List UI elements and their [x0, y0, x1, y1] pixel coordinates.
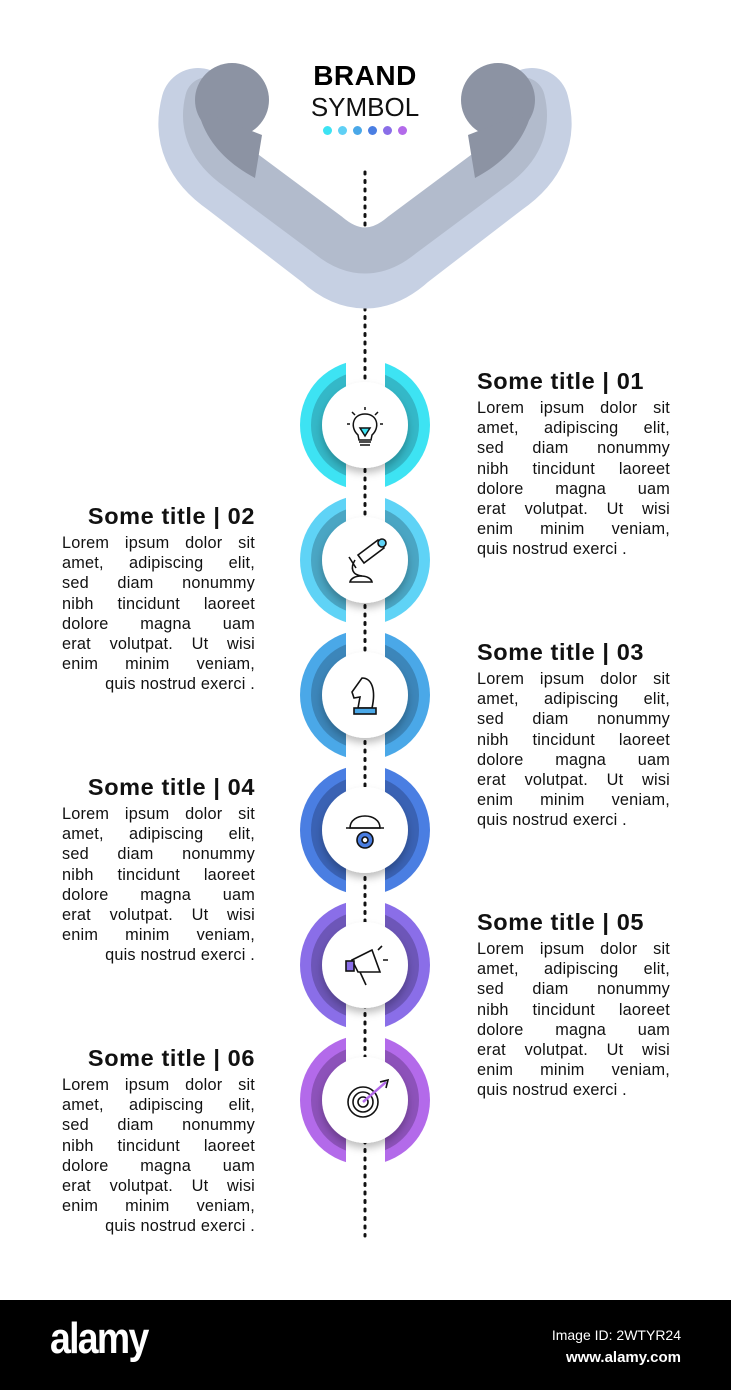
image id: Image ID: 2WTYR24: [552, 1327, 681, 1343]
text block 06: quis nostrud exerci .: [105, 1217, 255, 1235]
step 5 ring: [300, 900, 430, 1030]
color dots: [323, 126, 407, 135]
text block 06: amet, adipiscing elit,: [62, 1096, 255, 1114]
text block 03: Some title | 03: [477, 639, 644, 665]
dotted timeline: [364, 172, 366, 1236]
text block 02: [62, 503, 255, 693]
text block 04: erat volutpat. Ut wisi: [62, 906, 255, 924]
text block 01: sed diam nonummy: [477, 439, 670, 457]
text block 06: [62, 1045, 255, 1235]
text block 04: Some title | 04: [88, 774, 255, 800]
text block 02: dolore magna uam: [62, 615, 255, 633]
text block 01: Lorem ipsum dolor sit: [477, 399, 670, 417]
footer banner: [0, 1300, 731, 1390]
text block 03: dolore magna uam: [477, 751, 670, 769]
text block 02: nibh tincidunt laoreet: [62, 595, 255, 613]
text block 04: sed diam nonummy: [62, 845, 255, 863]
text block 02: Lorem ipsum dolor sit: [62, 534, 255, 552]
text block 01: Some title | 01: [477, 368, 644, 394]
step 2 ring: [300, 495, 430, 625]
alamy logo: alamy: [50, 1314, 148, 1363]
text block 06: erat volutpat. Ut wisi: [62, 1177, 255, 1195]
icon: target: [348, 1080, 388, 1117]
text block 05: dolore magna uam: [477, 1021, 670, 1039]
icon: microscope: [349, 539, 386, 582]
title: BRAND SYMBOL: [311, 60, 419, 135]
text block 06: nibh tincidunt laoreet: [62, 1137, 255, 1155]
step 6 ring: [300, 1035, 430, 1165]
text block 01: erat volutpat. Ut wisi: [477, 500, 670, 518]
text block 05: [477, 909, 670, 1099]
step circles: [300, 362, 430, 1162]
image id: [552, 1327, 681, 1366]
text block 01: quis nostrud exerci .: [477, 540, 627, 558]
title: BRAND SYMBOL: SYMBOL: [311, 92, 419, 122]
text block 03: Lorem ipsum dolor sit: [477, 670, 670, 688]
text block 02: erat volutpat. Ut wisi: [62, 635, 255, 653]
image id: www.alamy.com: [566, 1349, 681, 1366]
text block 04: amet, adipiscing elit,: [62, 825, 255, 843]
text block 04: Lorem ipsum dolor sit: [62, 805, 255, 823]
text block 01: [477, 368, 670, 558]
text block 06: dolore magna uam: [62, 1157, 255, 1175]
text block 03: sed diam nonummy: [477, 710, 670, 728]
text block 01: dolore magna uam: [477, 480, 670, 498]
text block 05: sed diam nonummy: [477, 980, 670, 998]
icon: helmet gear: [346, 816, 384, 848]
text block 01: nibh tincidunt laoreet: [477, 460, 670, 478]
text block 06: Some title | 06: [88, 1045, 255, 1071]
text block 05: amet, adipiscing elit,: [477, 960, 670, 978]
text block 05: Some title | 05: [477, 909, 644, 935]
logo graphic: V-shaped band: [195, 63, 535, 272]
icon: light bulb: [347, 407, 383, 445]
text block 06: enim minim veniam,: [62, 1197, 255, 1215]
text block 06: sed diam nonummy: [62, 1116, 255, 1134]
text block 03: [477, 639, 670, 829]
text block 02: quis nostrud exerci .: [105, 675, 255, 693]
text block 03: erat volutpat. Ut wisi: [477, 771, 670, 789]
icon: megaphone: [346, 946, 388, 985]
text block 03: enim minim veniam,: [477, 791, 670, 809]
text block 05: enim minim veniam,: [477, 1061, 670, 1079]
icon: chess knight: [352, 678, 376, 714]
text block 02: sed diam nonummy: [62, 574, 255, 592]
text block 01: amet, adipiscing elit,: [477, 419, 670, 437]
text block 04: [62, 774, 255, 964]
title: BRAND SYMBOL: BRAND: [313, 60, 417, 91]
text block 04: quis nostrud exerci .: [105, 946, 255, 964]
text block 03: nibh tincidunt laoreet: [477, 731, 670, 749]
text block 04: enim minim veniam,: [62, 926, 255, 944]
text block 03: amet, adipiscing elit,: [477, 690, 670, 708]
text block 02: Some title | 02: [88, 503, 255, 529]
text block 05: Lorem ipsum dolor sit: [477, 940, 670, 958]
text block 02: enim minim veniam,: [62, 655, 255, 673]
text block 04: nibh tincidunt laoreet: [62, 866, 255, 884]
text block 05: quis nostrud exerci .: [477, 1081, 627, 1099]
step 1 ring: [300, 360, 430, 490]
text block 03: quis nostrud exerci .: [477, 811, 627, 829]
text block 01: enim minim veniam,: [477, 520, 670, 538]
text block 05: nibh tincidunt laoreet: [477, 1001, 670, 1019]
text block 06: Lorem ipsum dolor sit: [62, 1076, 255, 1094]
text block 04: dolore magna uam: [62, 886, 255, 904]
text block 05: erat volutpat. Ut wisi: [477, 1041, 670, 1059]
step 3 ring: [300, 630, 430, 760]
step 4 ring: [300, 765, 430, 895]
text block 02: amet, adipiscing elit,: [62, 554, 255, 572]
